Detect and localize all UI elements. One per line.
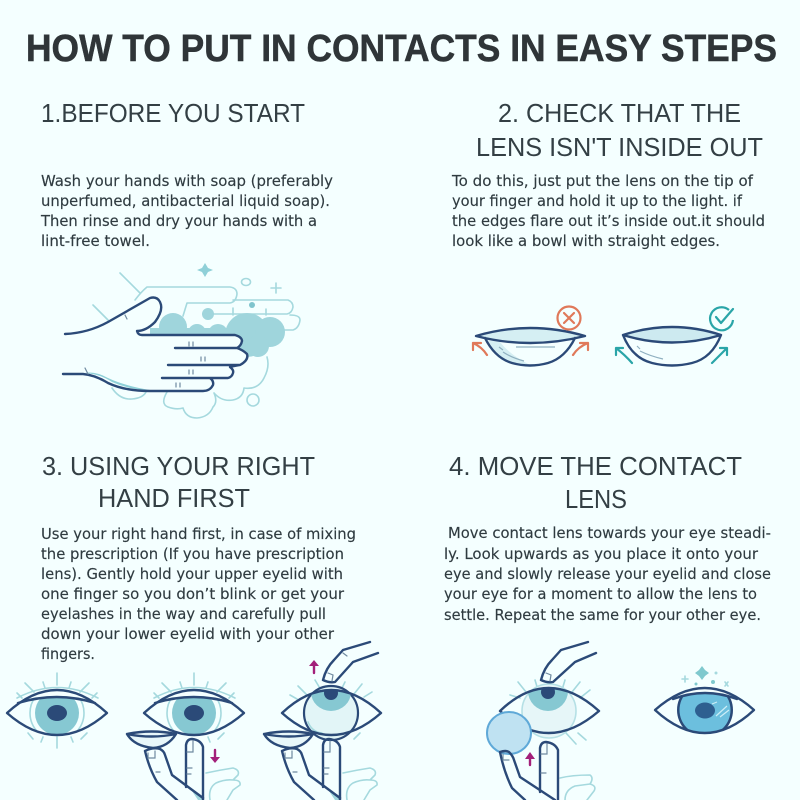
icon: eye with lid lifted by finger <box>264 642 381 800</box>
text block: step 2: the edges flare out it’s inside out.it should <box>452 212 765 230</box>
heading: step 1: 1.BEFORE YOU START <box>41 98 305 128</box>
heading: step 3: 3. USING YOUR RIGHT <box>42 451 315 481</box>
panel: step 2 check the lens <box>451 98 765 366</box>
heading: step 3: HAND FIRST <box>98 483 250 513</box>
text block: step 4: eye and slowly release your eyelid and close <box>444 565 771 583</box>
text block: step 1: Then rinse and dry your hands with a <box>40 212 317 230</box>
heading: step 4: LENS <box>565 484 627 514</box>
text block: step 3: down your lower eyelid with your other <box>41 625 335 643</box>
icon: hands washing with soap <box>63 263 300 418</box>
text block: step 1: Wash your hands with soap (preferably <box>41 172 333 190</box>
text block: step 4: settle. Repeat the same for your other eye. <box>444 606 761 624</box>
icon: inside-out lens <box>473 306 588 366</box>
heading: step 2 <box>476 98 763 162</box>
text block: step 1: unperfumed, antibacterial liquid soap). <box>41 192 330 210</box>
hand fill <box>63 298 247 391</box>
text block: step 3: Use your right hand first, in case of mixing <box>41 525 356 543</box>
text block: step 3 <box>41 525 356 663</box>
icon: eye with lens settled and sparkles <box>655 666 754 738</box>
text block: step 4: your eye for a moment to allow the lens to <box>444 585 757 603</box>
text block: step 2: To do this, just put the lens on the tip of <box>451 172 754 190</box>
text block: step 3: fingers. <box>41 645 95 663</box>
text block: step 4 <box>444 524 771 624</box>
heading: step 4 <box>449 451 742 514</box>
panel: step 4 move the contact lens <box>444 451 771 800</box>
text block: step 1: lint-free towel. <box>41 232 150 250</box>
text block: step 4: Move contact lens towards your eye steadi- <box>448 524 771 542</box>
heading: step 3 <box>42 451 315 513</box>
text block: step 3: eyelashes in the way and carefully pull <box>41 605 326 623</box>
icon: lens moving toward eye <box>487 642 599 800</box>
text block: step 3: one finger so you don’t blink or get your <box>41 585 345 603</box>
curled fingers <box>343 768 377 800</box>
text block: step 3: lens). Gently hold your upper eyelid with <box>41 565 343 583</box>
panel: step 3 using your right hand first <box>7 451 381 800</box>
panel: step 1 before you start <box>40 98 333 418</box>
navy hand outline <box>63 298 247 391</box>
lens on thumb <box>264 732 313 748</box>
icon: open eye <box>7 673 107 748</box>
text block: step 2: your finger and hold it up to the light. if <box>452 192 743 210</box>
heading: step 4: 4. MOVE THE CONTACT <box>449 451 742 481</box>
icon: eye with lens on finger and lid pulled down <box>127 673 244 800</box>
text block: step 4: ly. Look upwards as you place it onto your <box>444 545 759 563</box>
icon: correct lens <box>616 307 733 366</box>
text block: step 2 <box>451 172 765 250</box>
curled fingers <box>206 768 240 800</box>
heading: step 2: 2. CHECK THAT THE <box>498 98 741 128</box>
lifting fingertip <box>323 642 378 682</box>
text block: step 2: look like a bowl with straight edges. <box>452 232 720 250</box>
text block: step 3: the prescription (If you have prescription <box>41 545 344 563</box>
contact lens <box>487 712 531 754</box>
lens on thumb <box>127 732 176 748</box>
text block: step 1 <box>40 172 333 250</box>
heading: step 2: LENS ISN'T INSIDE OUT <box>476 132 763 162</box>
